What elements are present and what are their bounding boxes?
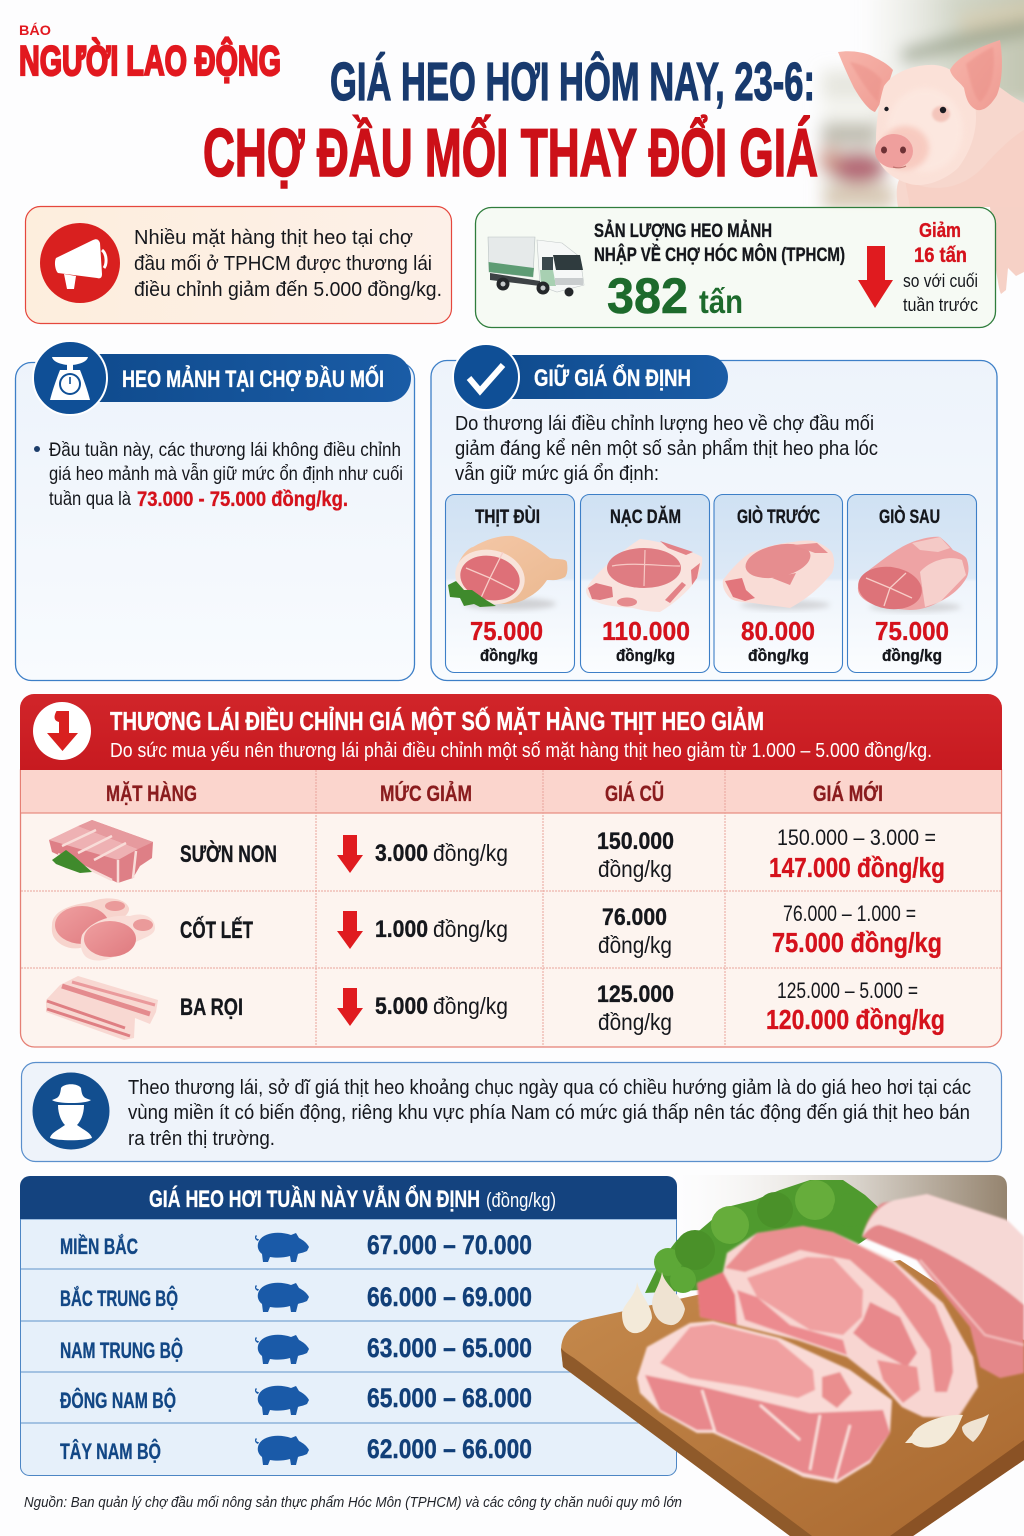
bullet text: tuần qua là [49,488,131,510]
icon: down arrow circle [33,702,91,760]
row: sườn non: SƯỜN NON [180,840,277,868]
paragraph [455,413,878,485]
card: giò trước [714,494,842,672]
row: bắc trung bộ: 66.000 – 69.000 [367,1282,532,1312]
back slab [862,1194,1024,1378]
column headers [21,770,1001,813]
card: giò trước: GIÒ TRƯỚC [737,506,820,528]
note text: ra trên thị trường. [128,1128,275,1150]
bullet text [34,439,403,511]
bullet text: giá heo mảnh mà vẫn giữ mức ổn định như cuối [49,462,403,485]
board [561,1260,1024,1536]
bullet text: Đầu tuần này, các thương lái không điều chỉnh [49,439,401,461]
icon: scale [50,357,90,400]
volume figure: tấn [699,283,743,320]
source note: Nguồn: Ban quản lý chợ đầu mối nông sản thực phẩm Hóc Môn (TPHCM) và các công ty chăn nuôi quy mô lớn [24,1494,682,1511]
middle slab [697,1226,978,1418]
head [876,65,976,185]
panel: traders note [22,1062,1002,1162]
eyes [932,106,950,122]
newspaper logo: BÁO [19,22,51,38]
panel: summary callout [26,206,452,324]
row: nam trung bộ: 63.000 – 65.000 [367,1333,532,1363]
table banner: THƯƠNG LÁI ĐIỀU CHỈNH GIÁ MỘT SỐ MẶT HÀNG THỊT HEO GIẢM [110,706,764,736]
backdrop [677,1175,1007,1240]
icon: megaphone [40,223,120,303]
note text [128,1077,971,1150]
row: ba rọi: đồng/kg [598,1009,672,1035]
panel: giữ giá ổn định [431,344,997,680]
card: thịt đùi [446,494,574,672]
row: cốt lết [52,898,942,960]
row: cốt lết: CỐT LẾT [180,916,253,944]
pig body [897,86,1024,207]
right ear [950,40,1002,110]
column headers: GIÁ CŨ [605,781,664,806]
change label: 16 tấn [914,244,967,267]
table banner: Do sức mua yếu nên thương lái phải điều chỉnh một số mặt hàng thịt heo giảm từ 1.000 – 5.000 đồng/kg. [110,740,932,762]
note text: vùng miền ít có biến động, riêng khu vực phía Nam có mức giá thấp nên tác động đến giá thịt heo bán [128,1102,970,1124]
card: giò sau: đồng/kg [882,646,942,665]
newspaper logo [19,22,281,84]
row: ba rọi: 125.000 [597,981,674,1008]
row: bắc trung bộ [60,1282,532,1312]
change label: tuần trước [903,295,978,315]
table heading: GIÁ HEO HƠI TUẦN NÀY VẪN ỔN ĐỊNH [149,1184,480,1213]
heading pill: GIỮ GIÁ ỔN ĐỊNH [534,364,691,392]
summary text: đầu mối ở TPHCM được thương lái [134,253,432,275]
front slab [637,1321,892,1483]
row: miền bắc: MIỀN BẮC [60,1234,138,1259]
row: tây nam bộ: 62.000 – 66.000 [367,1434,532,1464]
card: nạc dăm: đồng/kg [616,646,675,665]
volume heading: SẢN LƯỢNG HEO MẢNH [594,220,772,242]
card: nạc dăm [580,494,710,672]
garlic [622,1272,989,1448]
row: ba rọi [46,976,945,1040]
row: cốt lết: 75.000 đồng/kg [772,927,942,958]
heading pill: HEO MẢNH TẠI CHỢ ĐẦU MỐI [122,364,384,393]
row: đông nam bộ: ĐÔNG NAM BỘ [60,1388,176,1413]
change label [903,220,978,315]
bullet text: 73.000 - 75.000 đồng/kg. [137,488,348,511]
summary text: điều chỉnh giảm đến 5.000 đồng/kg. [134,279,442,301]
card: thịt đùi: đồng/kg [480,646,538,665]
change label: Giảm [919,220,961,242]
row: cốt lết: đồng/kg [598,932,672,958]
card: giò trước: 80.000 [741,616,815,646]
table heading [20,1176,677,1219]
row: sườn non: 150.000 – 3.000 = [777,825,936,850]
row: ba rọi: 125.000 – 5.000 = [777,978,918,1003]
row: cốt lết: 76.000 – 1.000 = [783,901,916,926]
card: thịt đùi: THỊT ĐÙI [475,506,540,528]
row: cốt lết: đồng/kg [433,916,508,942]
table banner [20,694,1002,770]
row: nam trung bộ [60,1333,532,1364]
card: nạc dăm: NẠC DĂM [610,506,681,528]
note text: Theo thương lái, sở dĩ giá thịt heo khoảng chục ngày qua có chiều hướng giảm là do giá heo hơi tại các [128,1077,971,1099]
column headers: MỨC GIẢM [380,781,472,806]
title [203,51,818,191]
panel: regional live-hog prices [20,1176,677,1476]
row: cốt lết: 1.000 [375,916,428,943]
panel: price drop table [20,694,1002,1047]
left ear [838,51,893,112]
icon: down arrow [858,246,893,308]
meat: pork belly [46,976,158,1040]
row: tây nam bộ [60,1434,532,1465]
row: ba rọi: đồng/kg [433,993,508,1019]
column headers: GIÁ MỚI [813,781,883,806]
card: thịt đùi: 75.000 [470,616,543,646]
row: ba rọi: 120.000 đồng/kg [766,1004,945,1035]
paragraph: Do thương lái điều chỉnh lượng heo về chợ đầu mối [455,413,874,435]
row: đông nam bộ [60,1383,532,1415]
icon: truck [488,237,584,296]
summary text: Nhiều mặt hàng thịt heo tại chợ [134,227,413,249]
row: sườn non: đồng/kg [433,840,508,866]
card: giò sau [848,494,976,672]
volume heading: NHẬP VỀ CHỢ HÓC MÔN (TPHCM) [594,244,845,266]
panel: heo mảnh [16,341,414,680]
volume heading [594,220,845,266]
lettuce [645,1180,878,1293]
row: ba rọi: 5.000 [375,993,428,1020]
row: sườn non: 3.000 [375,840,428,867]
change label: so với cuối [903,271,978,291]
row: ba rọi: BA RỌI [180,994,243,1021]
row: miền bắc: 67.000 – 70.000 [367,1230,532,1260]
illustration: pork on cutting board [561,1175,1024,1536]
card: giò sau: 75.000 [875,616,949,646]
row: bắc trung bộ: BẮC TRUNG BỘ [60,1286,178,1311]
meat: ribs [49,820,153,883]
paragraph: giảm đáng kể nên một số sản phẩm thịt heo pha lóc [455,438,878,460]
row: miền bắc [60,1230,532,1262]
row: nam trung bộ: NAM TRUNG BỘ [60,1338,183,1363]
heading pill [453,344,728,410]
summary text [134,227,442,301]
card: giò trước: đồng/kg [748,646,809,665]
hero illustration: pig in market [818,0,1024,294]
paragraph: vẫn giữ mức giá ổn định: [455,462,659,485]
card: giò sau: GIÒ SAU [879,506,940,528]
table heading: (đồng/kg) [486,1190,556,1212]
row: sườn non [49,820,945,883]
snout [881,126,929,170]
row: tây nam bộ: TÂY NAM BỘ [60,1439,161,1464]
icon: trader with hat [32,1072,110,1150]
meat: cutlets [52,898,155,960]
row: sườn non: đồng/kg [598,856,672,882]
volume figure: 382 [607,268,688,324]
card: nạc dăm: 110.000 [602,616,690,646]
row: sườn non: 147.000 đồng/kg [769,852,945,883]
volume figure [607,268,743,324]
heading pill [33,341,411,415]
row: cốt lết: 76.000 [602,904,667,931]
column headers: MẶT HÀNG [106,781,197,806]
row: đông nam bộ: 65.000 – 68.000 [367,1383,532,1413]
panel: volume [476,208,996,328]
row: sườn non: 150.000 [597,828,674,855]
newspaper logo: NGƯỜI LAO ĐỘNG [19,36,281,84]
